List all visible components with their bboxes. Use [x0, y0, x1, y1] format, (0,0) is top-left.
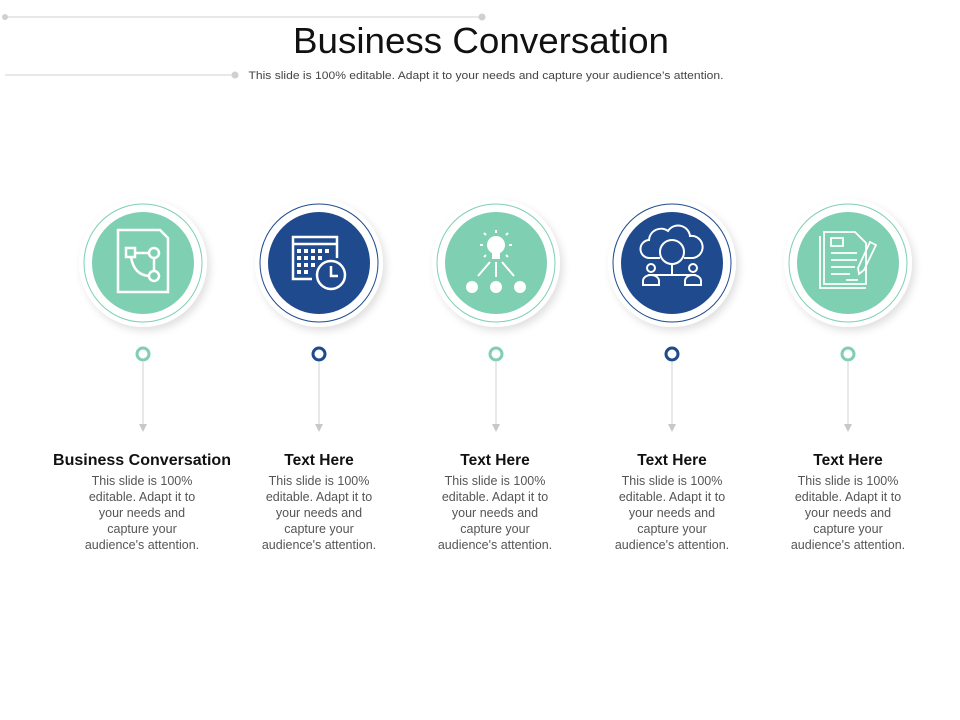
icon: calendar clock	[293, 237, 345, 289]
text 1: audience's attention.	[85, 538, 199, 552]
text 2	[262, 452, 376, 552]
icon circle 3	[432, 199, 560, 327]
text 4: capture your	[637, 522, 707, 536]
icon: document with pen	[820, 232, 876, 288]
text 4: Text Here	[637, 452, 707, 469]
text 5: capture your	[813, 522, 883, 536]
text 3: your needs and	[452, 506, 538, 520]
text 5: your needs and	[805, 506, 891, 520]
text 1	[53, 452, 231, 552]
icon circle 1	[79, 199, 207, 327]
item 4	[608, 199, 736, 552]
icon: bulb distribution	[466, 236, 526, 293]
text 2: audience's attention.	[262, 538, 376, 552]
item 5	[784, 199, 912, 552]
text 2: capture your	[284, 522, 354, 536]
icon circle 4	[608, 199, 736, 327]
text 3: editable. Adapt it to	[442, 490, 548, 504]
item 2	[255, 199, 383, 552]
text 4: This slide is 100%	[622, 474, 722, 488]
text 3: audience's attention.	[438, 538, 552, 552]
text 3: Text Here	[460, 452, 530, 469]
text 4	[615, 452, 729, 552]
item 1	[53, 199, 231, 552]
title: Business Conversation	[293, 20, 669, 61]
icon circle 2	[255, 199, 383, 327]
text 5: editable. Adapt it to	[795, 490, 901, 504]
icon: flow document	[118, 230, 168, 292]
text 3: This slide is 100%	[445, 474, 545, 488]
icon circle 5	[784, 199, 912, 327]
connector 2	[313, 348, 325, 428]
text 1: Business Conversation	[53, 452, 231, 469]
icon: cloud network	[640, 225, 703, 285]
text 4: your needs and	[629, 506, 715, 520]
text 3	[438, 452, 552, 552]
text 1: This slide is 100%	[92, 474, 192, 488]
text 4: audience's attention.	[615, 538, 729, 552]
text 4: editable. Adapt it to	[619, 490, 725, 504]
text 2: your needs and	[276, 506, 362, 520]
text 3: capture your	[460, 522, 530, 536]
text 1: your needs and	[99, 506, 185, 520]
text 5: This slide is 100%	[798, 474, 898, 488]
connector 5	[842, 348, 854, 428]
text 5	[791, 452, 905, 552]
subtitle: This slide is 100% editable. Adapt it to your needs and capture your audience’s attention.	[248, 70, 724, 82]
text 5: audience's attention.	[791, 538, 905, 552]
text 1: capture your	[107, 522, 177, 536]
text 2: Text Here	[284, 452, 354, 469]
connector 4	[666, 348, 678, 428]
text 2: This slide is 100%	[269, 474, 369, 488]
item 3	[432, 199, 560, 552]
connector 1	[137, 348, 149, 428]
text 2: editable. Adapt it to	[266, 490, 372, 504]
decorative top lines	[2, 14, 486, 78]
connector 3	[490, 348, 502, 428]
text 5: Text Here	[813, 452, 883, 469]
text 1: editable. Adapt it to	[89, 490, 195, 504]
